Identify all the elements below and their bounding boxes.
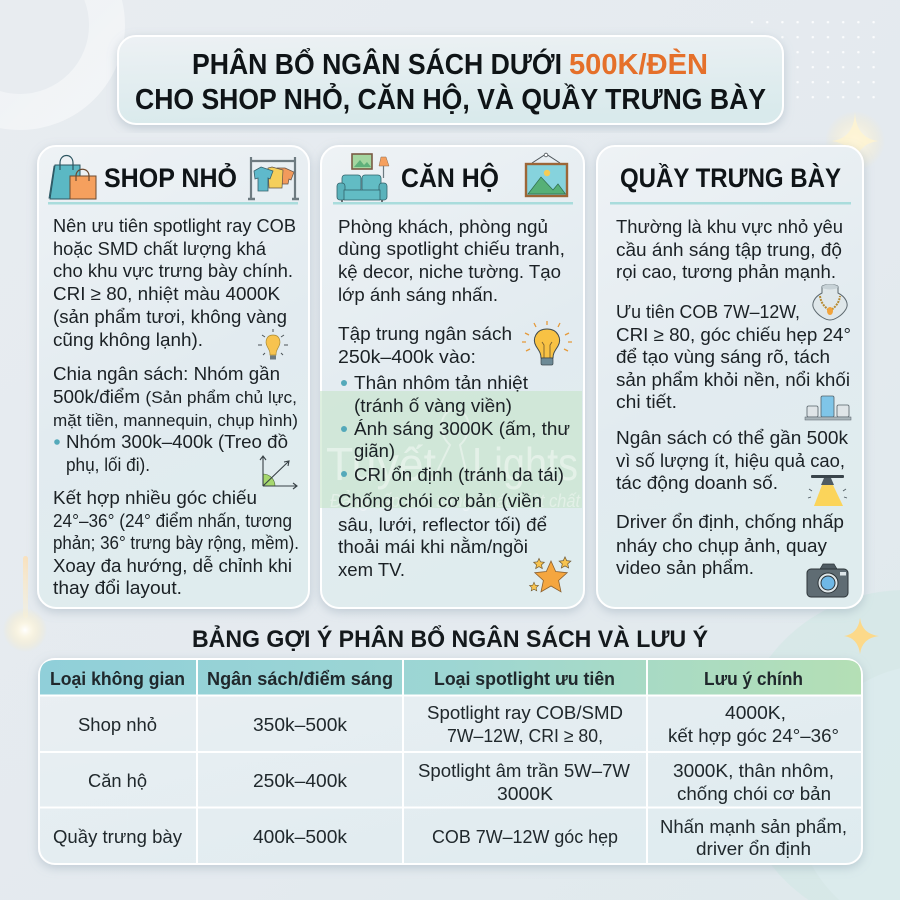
text block: intro: dùng spotlight chiếu tranh, [338, 238, 565, 259]
text block: budget split: phụ, lối đi). [66, 454, 150, 475]
watermark [320, 391, 582, 511]
text block: beam angles [53, 487, 299, 598]
text block: intro: (sản phẩm tươi, không vàng [53, 306, 287, 327]
icon: framed picture [526, 153, 567, 196]
divider [333, 202, 573, 204]
table row: quầy trưng bày: 400k–500k [253, 826, 348, 847]
table header [39, 659, 862, 864]
text block: budget focus [338, 323, 570, 485]
table header: Loại không gian [50, 669, 185, 689]
text block: priority: CRI ≥ 80, góc chiếu hẹp 24° [616, 324, 851, 345]
icon: ceiling spotlight [808, 475, 847, 506]
title text: PHÂN BỔ NGÂN SÁCH DƯỚI [192, 47, 562, 81]
text block: anti-glare: thoải mái khi nằm/ngồi [338, 536, 528, 557]
text block: intro: lớp ánh sáng nhấn. [338, 284, 498, 305]
sparkle top right [825, 111, 885, 171]
text block: budget split: Nhóm 300k–400k (Treo đồ [66, 431, 288, 452]
icon: camera [807, 564, 848, 597]
text block: intro: Nên ưu tiên spotlight ray COB [53, 215, 296, 236]
text block: driver: nháy cho chụp ảnh, quay [616, 535, 828, 556]
heading: shop nhỏ: SHOP NHỎ [104, 161, 237, 193]
table row: shop nhỏ: 7W–12W, CRI ≥ 80, [447, 725, 603, 746]
text block: budget focus: (tránh ố vàng viền) [354, 395, 512, 416]
title text: CHO SHOP NHỎ, CĂN HỘ, VÀ QUẦY TRƯNG BÀY [135, 82, 766, 116]
icon: sofa with picture and lamp [337, 154, 389, 203]
table row: quầy trưng bày: COB 7W–12W góc hẹp [432, 826, 618, 847]
table row: căn hộ: 250k–400k [253, 770, 348, 791]
text block: intro: cầu ánh sáng tập trung, độ [616, 239, 842, 260]
table row: shop nhỏ: kết hợp góc 24°–36° [668, 725, 839, 746]
icon: light bulb [522, 321, 572, 365]
text block: intro: cũng không lạnh). [53, 329, 203, 350]
title text: 500K/ĐÈN [569, 47, 708, 81]
icon: necklace [813, 284, 847, 320]
text block: intro [338, 216, 565, 305]
table header: Loại spotlight ưu tiên [434, 669, 615, 689]
table heading: BẢNG GỢI Ý PHÂN BỔ NGÂN SÁCH VÀ LƯU Ý [192, 624, 708, 653]
watermark: Tuyết [326, 438, 436, 490]
table row: căn hộ: 3000K, thân nhôm, [673, 760, 834, 781]
table row: shop nhỏ: 4000K, [725, 702, 786, 723]
table row: căn hộ: Căn hộ [88, 770, 147, 791]
text block: intro: hoặc SMD chất lượng khá [53, 238, 267, 259]
table [39, 659, 862, 864]
text block: budget split: 500k/điểm (Sản phẩm chủ lực, [53, 386, 297, 407]
watermark: Lights [472, 438, 578, 490]
text block: beam angles: phản; 36° trưng bày rộng, mềm). [53, 532, 299, 553]
table row: căn hộ: chống chói cơ bản [677, 783, 831, 804]
text block: budget: tác động doanh số. [616, 472, 778, 493]
icon: clothes rack [248, 157, 299, 199]
table row: quầy trưng bày: Nhấn mạnh sản phẩm, [660, 816, 847, 837]
text block: budget focus: Thân nhôm tản nhiệt [354, 372, 528, 393]
icon: beam angle [260, 456, 297, 489]
text block: beam angles: Kết hợp nhiều góc chiếu [53, 487, 257, 508]
title text [135, 47, 766, 116]
watermark: Đẳng cấp ánh sáng Khác biệt chất [330, 490, 581, 511]
table row: căn hộ: Spotlight âm trần 5W–7W [418, 760, 631, 781]
text block: budget [616, 427, 849, 493]
text block: intro: Phòng khách, phòng ngủ [338, 216, 548, 237]
table row: quầy trưng bày [53, 816, 847, 859]
table row: shop nhỏ [78, 702, 839, 746]
text block: budget focus: giãn) [354, 440, 395, 461]
text block: beam angles: 24°–36° (24° điểm nhấn, tương [53, 510, 292, 531]
table row: shop nhỏ: Shop nhỏ [78, 714, 157, 735]
text block: intro: rọi cao, tương phản mạnh. [616, 261, 836, 282]
text block: beam angles: Xoay đa hướng, dễ chỉnh khi [53, 555, 292, 576]
text block: budget focus: Tập trung ngân sách [338, 323, 512, 344]
text block: budget: vì số lượng ít, hiệu quả cao, [616, 450, 845, 471]
icon: shopping bags [49, 156, 96, 199]
icon: product jars on shelf [805, 396, 851, 420]
table header: Ngân sách/điểm sáng [207, 669, 393, 689]
text block: priority: Ưu tiên COB 7W–12W, [616, 301, 800, 322]
text block: intro: Thường là khu vực nhỏ yêu [616, 216, 843, 237]
text block: intro: kệ decor, niche tường. Tạo [338, 261, 561, 282]
text block: anti-glare [338, 490, 547, 580]
text block: intro [616, 216, 843, 282]
text block: budget focus: Ánh sáng 3000K (ấm, thư [354, 418, 570, 439]
icon: small light bulb [258, 329, 288, 360]
icon: stars [529, 557, 571, 592]
text block: budget: Ngân sách có thể gần 500k [616, 427, 849, 448]
text block: priority: sản phẩm khỏi nền, nổi khối [616, 369, 850, 390]
panel: shop nhỏ [38, 146, 309, 608]
text block: priority: để tạo vùng sáng rõ, tách [616, 346, 830, 367]
text block: driver: Driver ổn định, chống nhấp [616, 511, 844, 532]
text block: anti-glare: xem TV. [338, 559, 405, 580]
text block: anti-glare: sâu, lưới, reflector tối) để [338, 514, 547, 535]
divider [610, 202, 851, 204]
divider [48, 202, 298, 204]
text block: budget split [53, 363, 298, 475]
text block: intro: cho khu vực trưng bày chính. [53, 260, 293, 281]
heading: quầy trưng bày: QUẦY TRƯNG BÀY [620, 162, 841, 193]
dot pattern top right [745, 10, 883, 100]
table header: Lưu ý chính [704, 669, 803, 689]
text block: driver: video sản phẩm. [616, 557, 754, 578]
text block: budget focus: 250k–400k vào: [338, 346, 476, 367]
text block: budget focus: CRI ổn định (tránh da tái) [354, 464, 564, 485]
table row: shop nhỏ: 350k–500k [253, 714, 348, 735]
text block: driver [616, 511, 844, 578]
table row: căn hộ: 3000K [497, 783, 554, 804]
table row: quầy trưng bày: driver ổn định [696, 838, 811, 859]
table row: căn hộ [88, 760, 834, 804]
decorative mint shapes bottom right [735, 590, 900, 900]
title panel [118, 36, 783, 124]
text block: anti-glare: Chống chói cơ bản (viền [338, 490, 542, 511]
table row: shop nhỏ: Spotlight ray COB/SMD [427, 702, 623, 723]
panel: quầy trưng bày [597, 146, 863, 608]
text block: priority: chi tiết. [616, 391, 677, 412]
panel: căn hộ [320, 146, 584, 608]
decorative ring top left [0, 0, 107, 112]
text block: budget split: Chia ngân sách: Nhóm gần [53, 363, 280, 384]
text block: intro [53, 215, 296, 350]
sparkle left with beam [3, 556, 47, 652]
text block: intro: CRI ≥ 80, nhiệt màu 4000K [53, 283, 281, 304]
table row: quầy trưng bày: Quầy trưng bày [53, 826, 183, 847]
sparkle bottom right [844, 618, 879, 654]
text block: beam angles: thay đổi layout. [53, 577, 182, 598]
text block: budget split: mặt tiền, mannequin, chụp hình) [53, 411, 298, 430]
heading: căn hộ: CĂN HỘ [401, 162, 499, 193]
text block: priority [616, 301, 851, 412]
